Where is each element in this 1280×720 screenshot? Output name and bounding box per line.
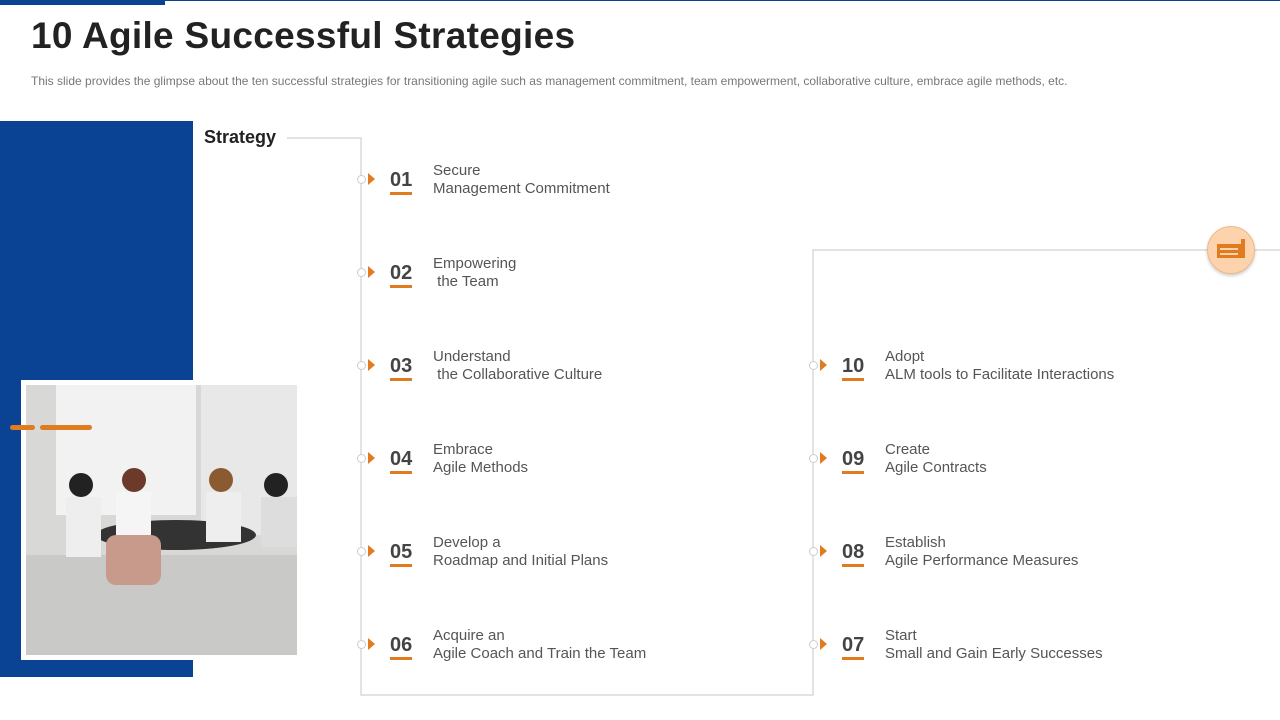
icon: tool	[1207, 226, 1255, 274]
item 05: Develop a Roadmap and Initial Plans	[433, 534, 608, 569]
item 10: 10	[842, 355, 864, 377]
item 07: 07	[842, 634, 864, 656]
item 04	[357, 441, 528, 476]
blue panel	[0, 121, 193, 677]
item 08: Establish Agile Performance Measures	[885, 534, 1078, 569]
orange dashes	[10, 425, 92, 430]
item 04: Embrace Agile Methods	[433, 441, 528, 476]
top bar	[0, 0, 1280, 5]
item 06: Acquire an Agile Coach and Train the Team	[433, 627, 646, 662]
item 01	[357, 162, 610, 197]
item 09	[809, 441, 987, 476]
item 04: 04	[390, 448, 412, 470]
item 10: Adopt ALM tools to Facilitate Interactions	[885, 348, 1114, 383]
item 07: Start Small and Gain Early Successes	[885, 627, 1103, 662]
item 02	[357, 255, 516, 290]
item 06: 06	[390, 634, 412, 656]
item 02: 02	[390, 262, 412, 284]
item 09: 09	[842, 448, 864, 470]
item 05	[357, 534, 608, 569]
subtitle: This slide provides the glimpse about the ten successful strategies for transitioning agile such as management commitment, team empowerment, collaborative culture, embrace agile methods, etc.	[31, 74, 1068, 88]
item 03: Understand the Collaborative Culture	[433, 348, 602, 383]
heading: strategy: Strategy	[204, 127, 276, 147]
item 05: 05	[390, 541, 412, 563]
item 03: 03	[390, 355, 412, 377]
item 01: 01	[390, 169, 412, 191]
item 01: Secure Management Commitment	[433, 162, 610, 197]
item 03	[357, 348, 602, 383]
title: 10 Agile Successful Strategies	[31, 15, 575, 56]
item 02: Empowering the Team	[433, 255, 516, 290]
item 08: 08	[842, 541, 864, 563]
item 09: Create Agile Contracts	[885, 441, 987, 476]
photo	[21, 380, 297, 660]
